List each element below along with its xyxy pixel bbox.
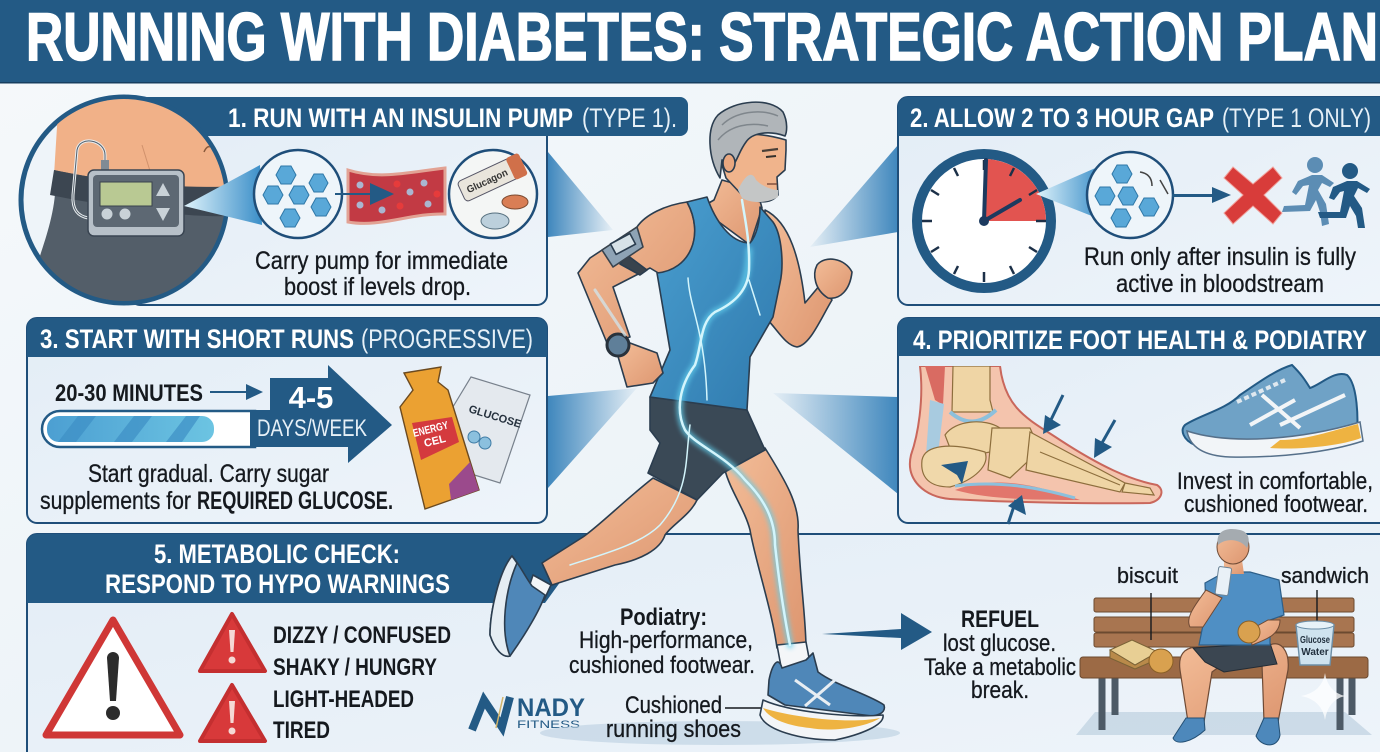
panel 1 caption (255, 247, 508, 301)
podiatry note: Podiatry: (620, 604, 707, 631)
insulin hexagon circle (254, 150, 342, 238)
panel 4 caption (1177, 468, 1373, 518)
panel 5 heading: RESPOND TO HYPO WARNINGS (105, 569, 450, 599)
refuel note: Take a metabolic (924, 654, 1076, 681)
shoe shadow (540, 721, 900, 745)
small warning icon (200, 685, 265, 741)
running shoe (1183, 365, 1363, 457)
beam from clock (1036, 166, 1102, 220)
clock (917, 154, 1051, 288)
back leg (542, 478, 697, 585)
brand logo: FITNESS (517, 719, 580, 731)
food labels: sandwich (1281, 563, 1369, 588)
arrow ray: panel 4 to runner (773, 393, 898, 494)
large warning icon (46, 620, 180, 735)
podiatry note: cushioned footwear. (569, 652, 755, 679)
arrow to refuel (822, 613, 932, 650)
small warning icon (200, 614, 265, 671)
arrow to X (1172, 187, 1231, 203)
glucose packet: GLUCOSE (467, 403, 523, 431)
panel 2 heading (898, 97, 1380, 136)
refuel note: REFUEL (961, 606, 1039, 633)
panel 2 heading: 2. ALLOW 2 TO 3 HOUR GAP (910, 103, 1214, 133)
symptom list: SHAKY / HUNGRY (273, 654, 437, 681)
runners icon (1282, 157, 1370, 228)
panel 3 heading: 3. START WITH SHORT RUNS (40, 324, 354, 354)
refuel note: break. (971, 677, 1029, 704)
energy gel (400, 367, 479, 509)
arrow ray: panel 2 to runner (810, 145, 898, 247)
right fist (815, 259, 852, 298)
panel 1 caption: Carry pump for immediate (255, 247, 508, 275)
shorts (648, 397, 765, 500)
energy gel: ENERGY (412, 419, 450, 440)
food labels: biscuit (1117, 563, 1178, 588)
energy gel: CEL (423, 433, 447, 450)
symptom list (273, 622, 451, 744)
refuel note: lost glucose. (943, 630, 1056, 657)
glucose packet (445, 377, 530, 483)
glucose water cup (1296, 621, 1334, 665)
left fist (617, 343, 663, 387)
insulin fading circle (1087, 152, 1173, 238)
glucagon circle: Glucagon (465, 167, 510, 196)
days per week arrow (250, 365, 392, 463)
cushioned shoes label (606, 692, 762, 743)
glucose water cup: Glucose (1300, 635, 1330, 646)
panel 3 caption (40, 460, 393, 515)
panel 3 caption: supplements for (40, 487, 191, 515)
central runner figure (490, 102, 884, 740)
front shoe (760, 653, 884, 740)
glucagon circle (449, 150, 537, 238)
food labels (1117, 563, 1369, 588)
sock (777, 642, 810, 672)
back shoe (490, 556, 551, 656)
cushioned shoes label: Cushioned (625, 692, 722, 719)
small arrow (210, 384, 263, 400)
insulin pump device (73, 141, 184, 236)
panel 2 caption (1084, 243, 1356, 298)
panel 1 heading: 1. RUN WITH AN INSULIN PUMP (228, 103, 573, 133)
cushioned shoes label: running shoes (606, 716, 741, 743)
days per week arrow: DAYS/WEEK (257, 415, 367, 442)
panel 2 caption: active in bloodstream (1116, 270, 1324, 298)
head (710, 102, 787, 202)
red X (1224, 167, 1282, 224)
foot anatomy (910, 366, 1161, 503)
right arm (765, 210, 832, 347)
symptom list: TIRED (273, 717, 330, 744)
panel 3 heading: (PROGRESSIVE) (361, 324, 533, 354)
foot arrow (1008, 495, 1026, 524)
panel 2: gap (898, 97, 1380, 305)
neck (700, 180, 762, 245)
panel 1 heading: (TYPE 1). (582, 103, 677, 133)
tank top (650, 197, 782, 410)
panel 3: short runs (27, 318, 547, 523)
armband (602, 227, 647, 275)
panel 5 heading (27, 534, 595, 603)
blood vessel (335, 168, 445, 223)
podiatry note (569, 604, 755, 679)
symptom list: LIGHT-HEADED (273, 686, 414, 713)
beam from pump (184, 165, 262, 225)
progress bar (42, 411, 255, 447)
brand logo (472, 694, 585, 731)
glowing vessel lines (570, 200, 790, 645)
podiatry note: High-performance, (579, 627, 753, 654)
watch (607, 334, 629, 356)
arrow ray: panel 3 to runner (548, 388, 637, 488)
sparkle mark (1301, 673, 1345, 720)
days per week arrow: 4-5 (289, 380, 333, 415)
symptom list: DIZZY / CONFUSED (273, 622, 451, 649)
refuel note (924, 606, 1076, 704)
panel 3 caption: Start gradual. Carry sugar (88, 460, 329, 488)
panel 5 heading: 5. METABOLIC CHECK: (154, 539, 400, 569)
brand logo: NADY (517, 694, 585, 722)
panel 1: insulin pump (21, 95, 688, 310)
glow under vessels (680, 250, 790, 645)
front leg (725, 448, 806, 648)
panel 5: metabolic check (27, 529, 1380, 752)
pump illustration circle (21, 95, 240, 310)
left shoulder and arm (578, 202, 695, 343)
panel 4: foot health (898, 318, 1380, 524)
glucose water cup: Water (1301, 647, 1329, 658)
panel 1 caption: boost if levels drop. (284, 273, 471, 301)
seated man (1173, 529, 1288, 745)
arrow ray: panel 1 to runner (548, 152, 613, 237)
panel 1 heading (140, 97, 688, 136)
duration label: 20-30 MINUTES (55, 380, 203, 407)
bench scene (1076, 590, 1372, 735)
panel 3 caption: REQUIRED GLUCOSE. (197, 487, 393, 515)
panel 3 heading (27, 318, 547, 357)
